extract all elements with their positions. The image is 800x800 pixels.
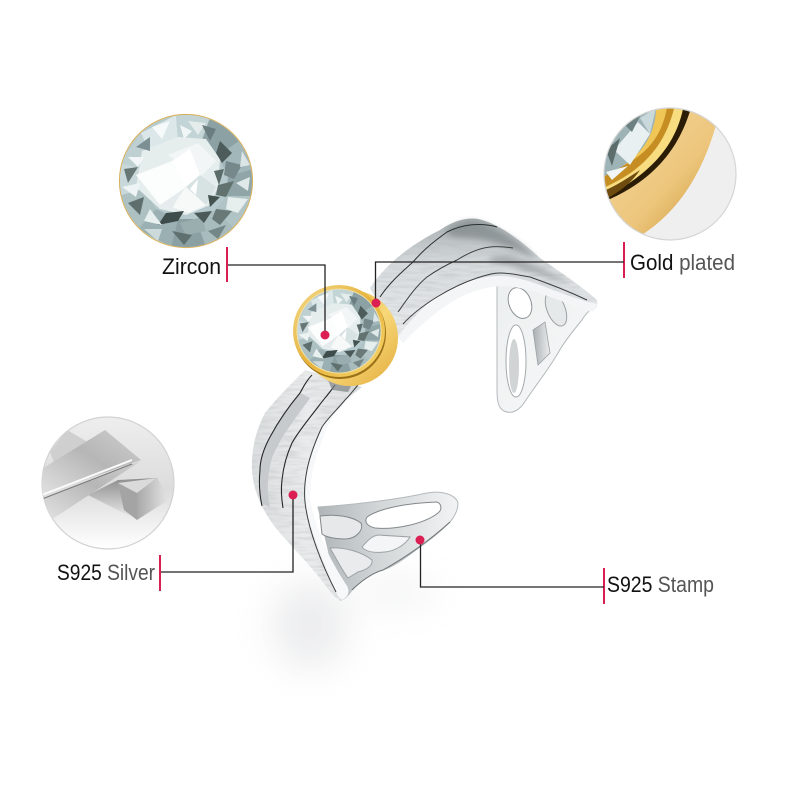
label: S925 Silver	[57, 490, 298, 591]
grey strip between grooves	[260, 393, 310, 507]
top ingot	[40, 430, 141, 495]
gem portion	[604, 110, 656, 176]
white underside of band	[398, 276, 597, 343]
cutouts	[504, 284, 536, 322]
label: Gold plated	[372, 242, 735, 308]
ring: upper wing with cutouts	[497, 282, 596, 412]
groove lines lower band	[259, 375, 312, 506]
cutouts	[366, 502, 441, 528]
icon: zircon stone in setting	[296, 289, 382, 373]
ring: upper band	[370, 219, 597, 343]
label: Zircon	[162, 247, 330, 340]
panel: zircon circle	[118, 114, 254, 248]
label: Gold plated: Gold plated	[630, 250, 735, 275]
matte gold band	[610, 112, 716, 234]
panel: silver ingots circle	[40, 417, 174, 549]
label: Zircon: Zircon	[162, 254, 221, 279]
ring cast shadow	[272, 578, 440, 670]
white inner flange	[305, 387, 362, 600]
lower wing polished edge	[352, 522, 450, 590]
gold circle border	[604, 108, 736, 240]
polished gold rim	[623, 108, 667, 166]
brushed shade under bezel	[328, 380, 352, 392]
back ingot	[50, 431, 86, 462]
brushed shading on top of band	[445, 221, 538, 260]
label: S925 Silver: S925 Silver	[57, 560, 155, 585]
groove lines upper band	[380, 225, 497, 297]
icon: zircon gem closeup	[118, 115, 254, 247]
label: S925 Stamp: S925 Stamp	[607, 572, 714, 597]
ring: gold bezel with zircon	[293, 285, 398, 386]
lower ingot	[88, 478, 164, 514]
dark rim reflection	[609, 110, 690, 199]
ring: lower wing with cutouts	[318, 492, 458, 600]
panel: gold plated circle	[604, 108, 736, 240]
label: S925 Stamp	[416, 536, 714, 604]
ring: lower band	[252, 370, 362, 600]
